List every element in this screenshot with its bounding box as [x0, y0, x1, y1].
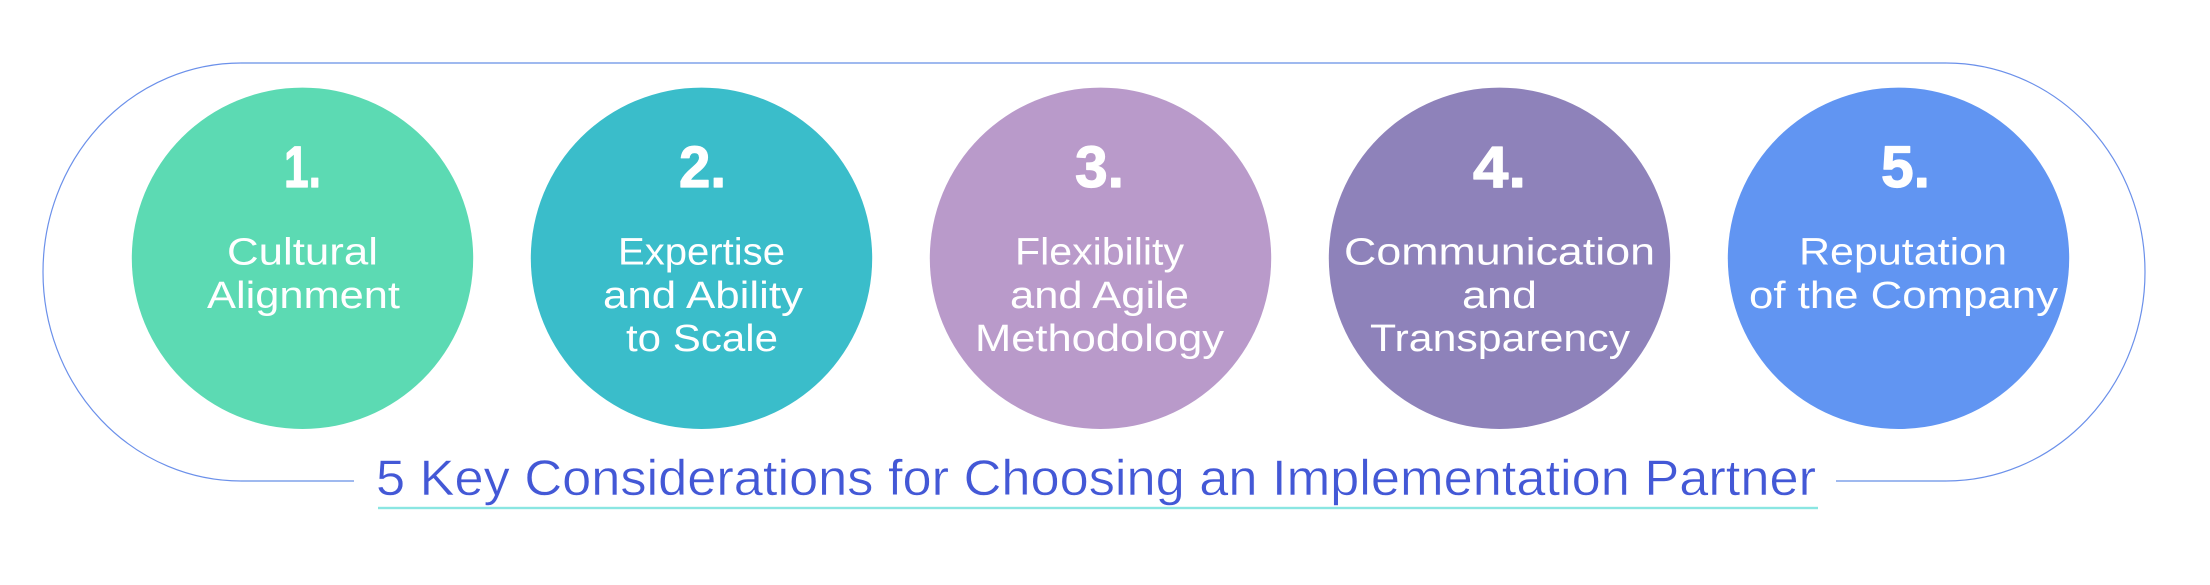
- label 2: Expertise: [618, 232, 785, 274]
- label 3: [975, 232, 1224, 360]
- label 3: Flexibility: [1015, 232, 1184, 274]
- panel: 1 cultural alignment: [132, 88, 473, 429]
- label 3: Methodology: [975, 318, 1224, 360]
- label 2: [603, 232, 803, 360]
- number 5: 5.: [1881, 135, 1930, 200]
- circle 1: [132, 88, 473, 429]
- panel: 5 reputation of the company: [1728, 88, 2069, 429]
- label 5: of the Company: [1749, 275, 2058, 317]
- label 1: Cultural: [227, 232, 378, 274]
- label 4: and: [1462, 275, 1537, 317]
- label 5: [1749, 232, 2058, 317]
- number 3: 3.: [1075, 135, 1124, 200]
- rounded outline frame: [43, 63, 2145, 481]
- circle 2: [531, 88, 872, 429]
- title underline: [378, 507, 1818, 509]
- number 4: 4.: [1473, 135, 1526, 200]
- title: 5 Key Considerations for Choosing an Implementation Partner: [376, 450, 1816, 506]
- number 1: 1.: [284, 135, 321, 200]
- circle 3: [930, 88, 1271, 429]
- label 3: and Agile: [1010, 275, 1189, 317]
- circle 4: [1329, 88, 1670, 429]
- label 1: Alignment: [207, 275, 400, 317]
- number 2: 2.: [679, 135, 726, 200]
- label 2: and Ability: [603, 275, 803, 317]
- panel: 2 expertise and ability to scale: [531, 88, 872, 429]
- label 4: [1344, 232, 1655, 360]
- panel: 4 communication and transparency: [1329, 88, 1670, 429]
- label 1: [207, 232, 400, 317]
- label 2: to Scale: [626, 318, 778, 360]
- panel: 3 flexibility and agile methodology: [930, 88, 1271, 429]
- label 4: Communication: [1344, 232, 1655, 274]
- label 4: Transparency: [1370, 318, 1630, 360]
- circle 5: [1728, 88, 2069, 429]
- label 5: Reputation: [1799, 232, 2007, 274]
